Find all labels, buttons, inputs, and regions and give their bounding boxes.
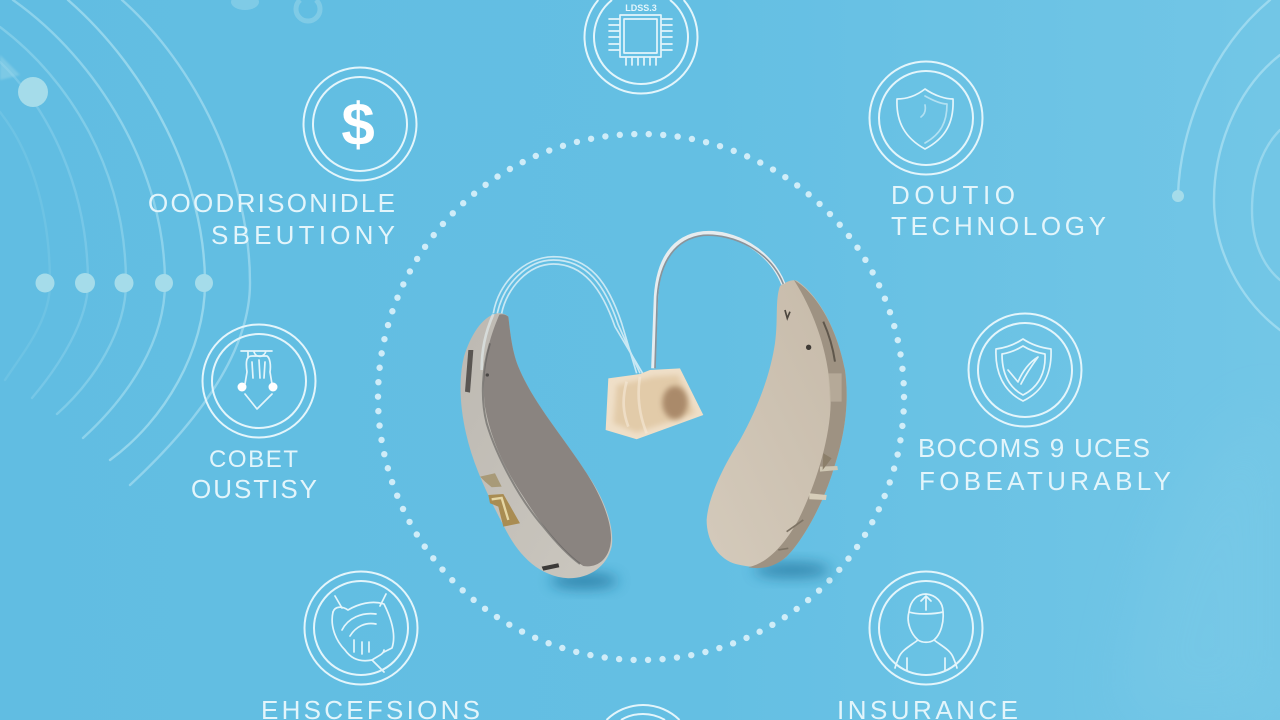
icon: dollar: $ — [341, 91, 375, 158]
left tube — [493, 257, 643, 373]
panel: technology / top right — [870, 62, 1106, 241]
label: OOODRISONIDLE — [148, 188, 395, 218]
hearing aids product — [461, 233, 847, 588]
right tube — [653, 233, 783, 368]
panel: cost / left — [191, 324, 317, 504]
label: COBET — [209, 446, 298, 473]
right hearing aid — [707, 280, 847, 568]
panel: exceptions / bottom left — [261, 572, 480, 720]
label: BOCOMS 9 UCES — [918, 433, 1150, 463]
label: DOUTIO — [891, 180, 1015, 210]
label line 2: SBEUTIONY — [211, 220, 395, 250]
icon: person — [870, 572, 982, 684]
left hearing aid — [461, 313, 612, 578]
decorative sound waves left — [0, 0, 320, 485]
decorative sound waves right — [1172, 0, 1280, 330]
label line 2: OUSTISY — [191, 474, 317, 504]
icon: dollar — [304, 68, 416, 180]
dotted circle — [378, 134, 904, 660]
label line 2: FOBEATURABLY — [919, 466, 1171, 496]
panel: chip / top center — [585, 0, 698, 93]
panel: insurance / bottom right — [837, 572, 1018, 720]
ear mold — [606, 368, 703, 439]
label line 2: TECHNOLOGY — [891, 211, 1106, 241]
shadow: left aid — [550, 574, 618, 588]
icon: handshake — [304, 572, 418, 684]
panel: sources / right — [918, 314, 1171, 496]
icon: bottom center circle — [606, 705, 680, 720]
icon: shield — [870, 62, 982, 174]
icon: hand — [202, 324, 316, 438]
panel: dollar / top left — [148, 68, 416, 250]
shadow: right aid — [754, 563, 830, 577]
icon: check shield — [968, 314, 1082, 426]
icon: chip: LDSS.3 — [625, 3, 657, 13]
